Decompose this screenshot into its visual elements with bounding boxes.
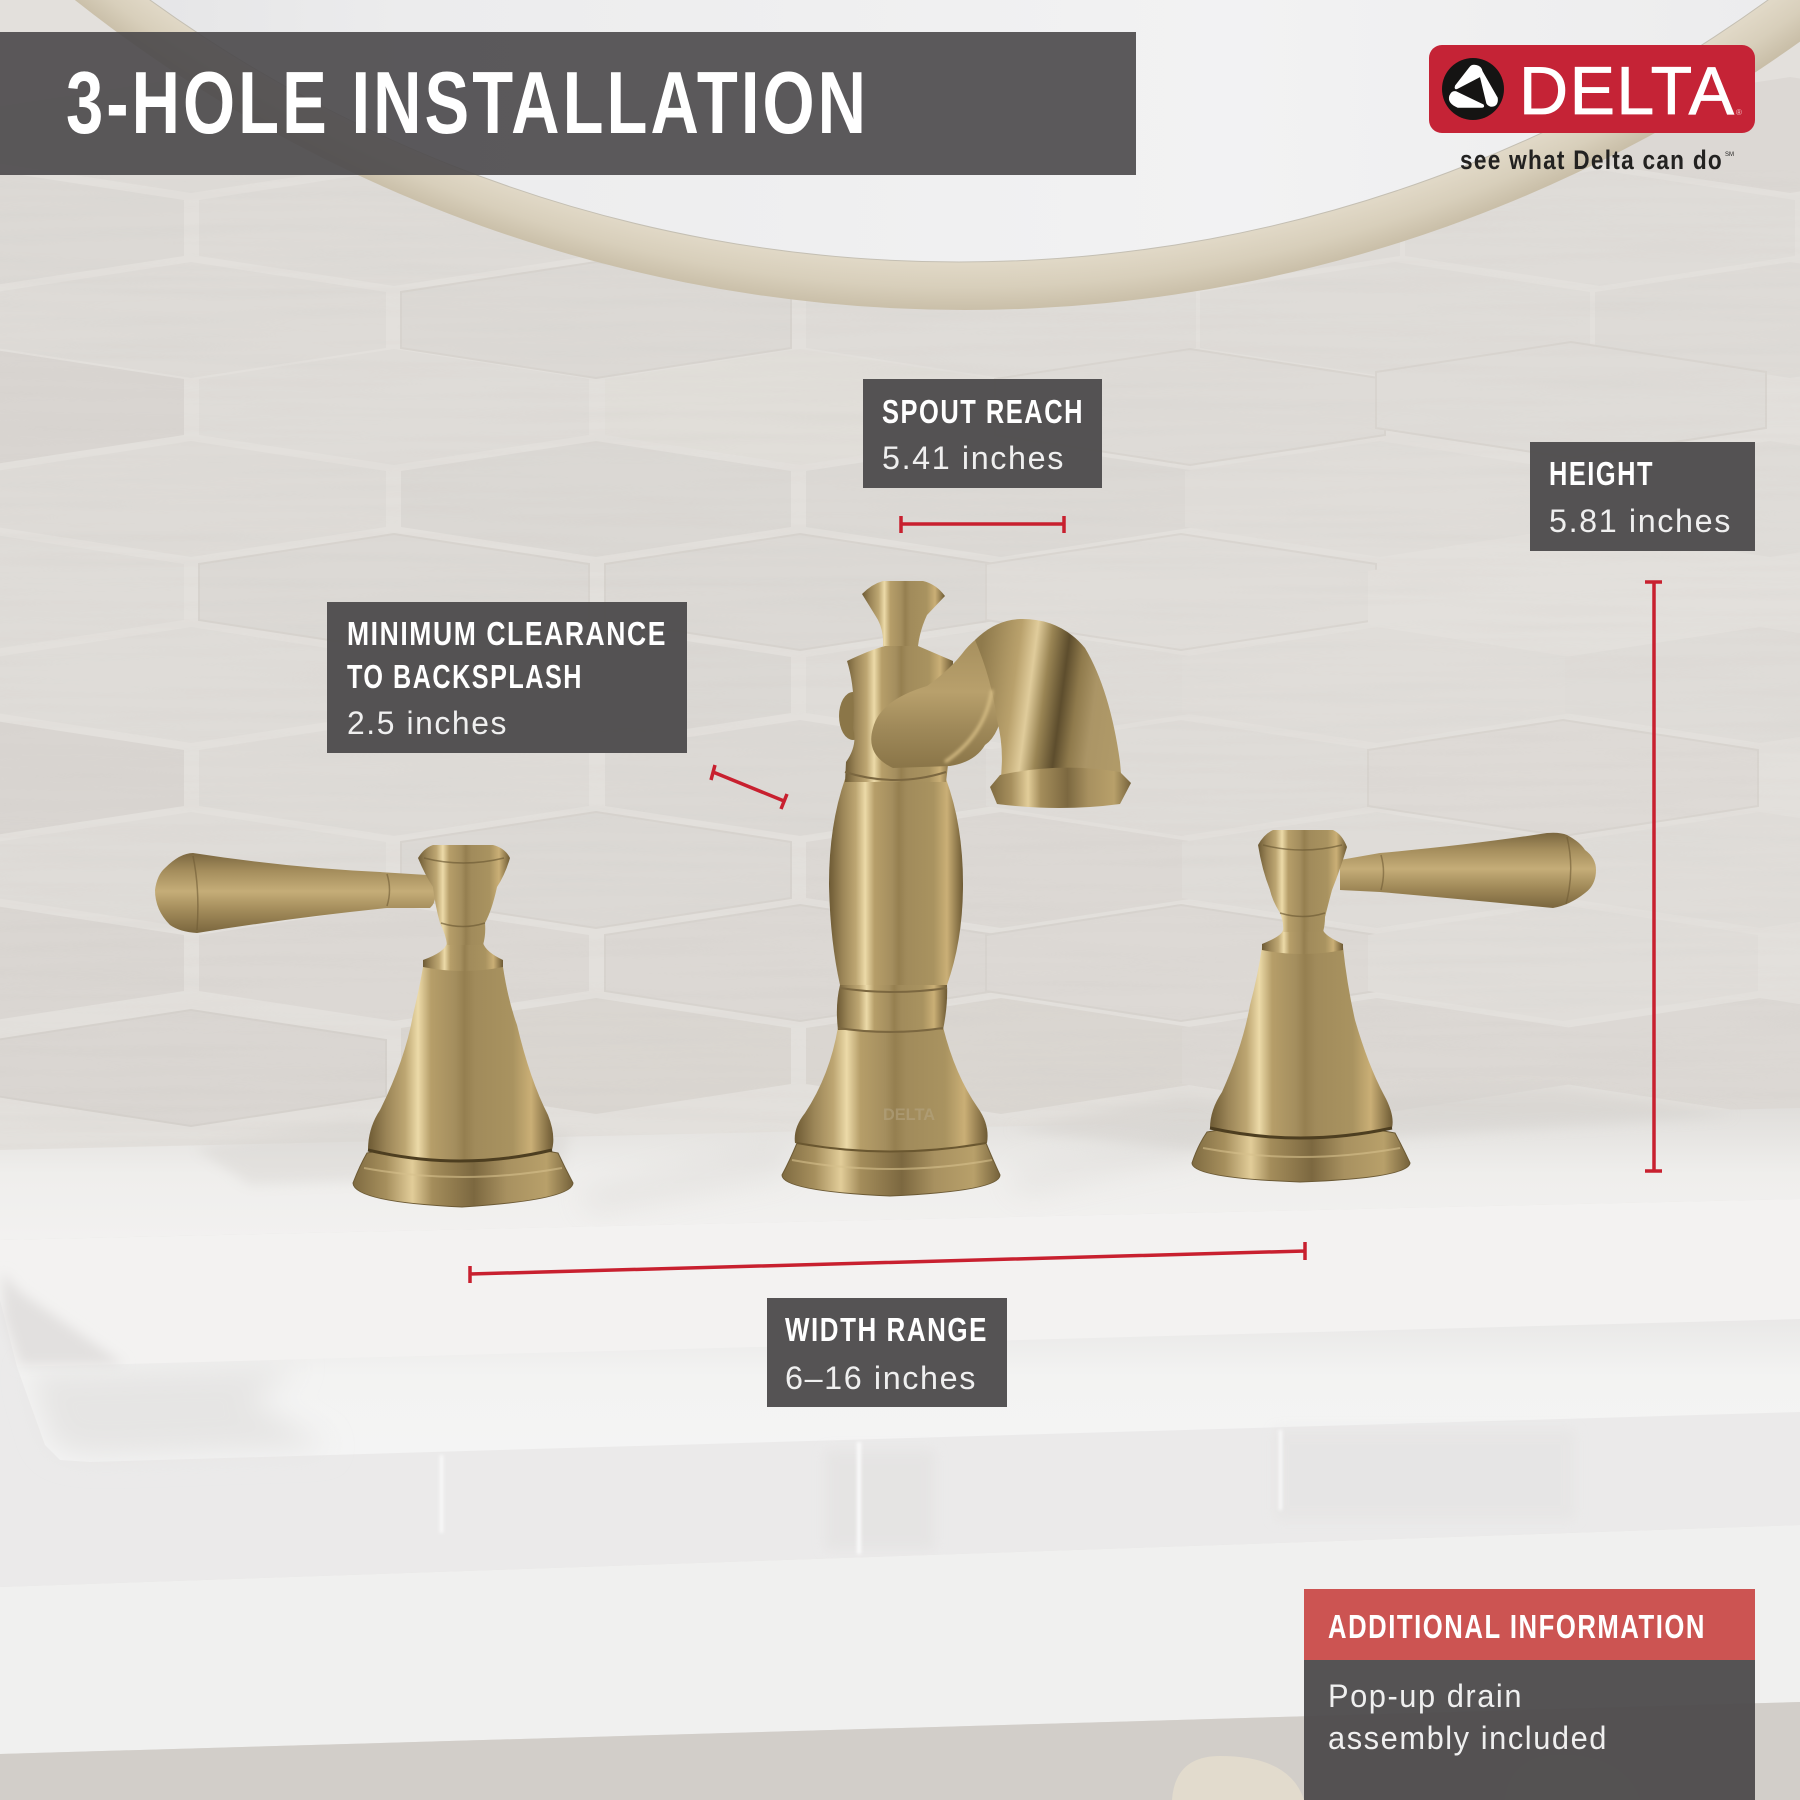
mirror with tan frame xyxy=(0,0,1800,310)
knob xyxy=(862,581,945,646)
tile reflections on countertop xyxy=(195,1087,1735,1215)
callout: spout reach xyxy=(863,379,1102,488)
counter lower front edge xyxy=(0,1525,1800,1754)
wall tiles xyxy=(0,77,1800,1126)
spout arch xyxy=(975,619,1122,785)
registered mark: ® xyxy=(1736,108,1742,117)
logo tagline: see what Delta can do xyxy=(1460,145,1723,175)
callout: spout reach: SPOUT REACH xyxy=(882,393,1084,430)
left handle xyxy=(155,845,573,1207)
wall stone texture xyxy=(0,170,1800,1160)
spout arm highlight xyxy=(945,690,992,762)
dimension: spout reach xyxy=(901,516,1064,533)
rear button xyxy=(839,692,867,740)
drain knobs xyxy=(1172,1755,1640,1800)
right handle lever xyxy=(1340,833,1596,908)
collar xyxy=(837,985,947,1030)
faucet reflections in counter xyxy=(440,1430,1575,1554)
base flange xyxy=(782,1132,1000,1196)
callout: height: 5.81 inches xyxy=(1549,503,1732,539)
right handle cap xyxy=(1258,830,1347,932)
callout: height: HEIGHT xyxy=(1549,455,1654,492)
right handle xyxy=(1192,830,1596,1182)
background wall xyxy=(0,0,1800,1200)
embossed logo: DELTA xyxy=(883,1105,935,1124)
countertop xyxy=(0,1108,1800,1240)
left handle bell xyxy=(368,967,553,1161)
service mark: SM xyxy=(1725,152,1734,158)
left handle base flange xyxy=(353,1144,573,1207)
callout: minimum clearance: 2.5 inches xyxy=(347,705,508,741)
callout: width range xyxy=(767,1298,1007,1407)
callout: minimum clearance: MINIMUM CLEARANCE xyxy=(347,615,667,652)
logo mark xyxy=(1442,58,1504,120)
left handle lever xyxy=(155,853,436,933)
callout: spout reach: 5.41 inches xyxy=(882,440,1065,476)
right handle bell xyxy=(1210,947,1393,1138)
panel heading xyxy=(1304,1589,1755,1660)
dimension: clearance xyxy=(711,765,787,809)
center faucet xyxy=(782,581,1131,1196)
title: 3-HOLE INSTALLATION xyxy=(66,53,869,152)
callout: minimum clearance: TO BACKSPLASH xyxy=(347,658,583,695)
spout tip xyxy=(990,768,1131,808)
right handle base flange xyxy=(1192,1124,1410,1182)
callout: minimum clearance xyxy=(327,602,687,753)
callout: width range: 6–16 inches xyxy=(785,1360,977,1396)
panel: additional information: ADDITIONAL INFORMATION xyxy=(1328,1608,1706,1645)
counter front edge xyxy=(0,1199,1800,1367)
bell xyxy=(795,1027,988,1152)
sink basin xyxy=(17,1319,1800,1462)
right handle neck xyxy=(1262,930,1343,954)
dimension: height xyxy=(1645,581,1662,1172)
body xyxy=(829,779,963,985)
lower countertop xyxy=(0,1199,1800,1587)
logo wordmark: DELTA xyxy=(1519,53,1735,129)
panel: additional information: assembly included xyxy=(1328,1720,1608,1756)
callout: width range: WIDTH RANGE xyxy=(785,1311,988,1348)
vanity below counter xyxy=(0,1702,1800,1800)
logo badge xyxy=(1429,45,1755,133)
spout arm xyxy=(871,630,1005,768)
Delta logo xyxy=(1429,45,1755,175)
title banner xyxy=(0,32,1136,175)
callout: height xyxy=(1530,442,1755,551)
left handle neck xyxy=(423,943,503,971)
neck xyxy=(845,646,953,782)
dimension: width xyxy=(470,1242,1305,1283)
left handle cap xyxy=(418,845,510,945)
panel body text: Pop-up drain xyxy=(1328,1678,1523,1714)
panel: additional information xyxy=(1304,1589,1755,1800)
